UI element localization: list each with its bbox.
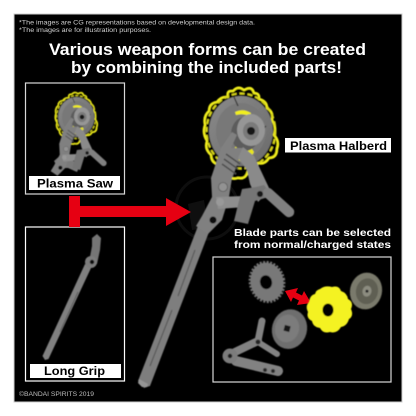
- disclaimer notes: [19, 20, 255, 34]
- label: plasma halberd: Plasma Halberd: [290, 141, 387, 153]
- olive disc: [347, 270, 385, 312]
- plasma halberd weapon: [138, 88, 289, 388]
- faint watermark wheel: [176, 177, 238, 239]
- title: by combining the included parts!: [71, 58, 342, 77]
- gray gear blade: [246, 259, 288, 305]
- plasma saw weapon head: [51, 92, 104, 176]
- label: plasma saw: Plasma Saw: [37, 176, 114, 190]
- arrow: double red: [285, 288, 311, 305]
- yellow charged blade: [307, 286, 352, 332]
- panel: long grip: [26, 227, 124, 381]
- panel: blade parts: [213, 257, 391, 382]
- caption: blade parts: Blade parts can be selected: [234, 228, 391, 239]
- title: [49, 40, 366, 77]
- label: long grip: [30, 364, 121, 378]
- caption: blade parts: [234, 228, 392, 251]
- caption: blade parts: from normal/charged states: [234, 240, 392, 251]
- gray disc: [267, 305, 312, 353]
- title: Various weapon forms can be created: [49, 40, 366, 59]
- arm part: [222, 321, 278, 372]
- label: plasma halberd: [285, 138, 391, 153]
- blade and arms: [196, 88, 289, 234]
- label: long grip: Long Grip: [44, 364, 105, 378]
- shaft: [138, 226, 209, 388]
- arrow: red connector: [69, 196, 191, 227]
- disclaimer notes: *The images are for illustration purposes.: [19, 27, 151, 34]
- long grip part: [42, 234, 101, 360]
- copyright: ©BANDAI SPIRITS 2019: [19, 390, 94, 398]
- panel: plasma saw: [26, 83, 124, 194]
- disclaimer notes: *The images are CG representations based on developmental design data.: [19, 20, 255, 26]
